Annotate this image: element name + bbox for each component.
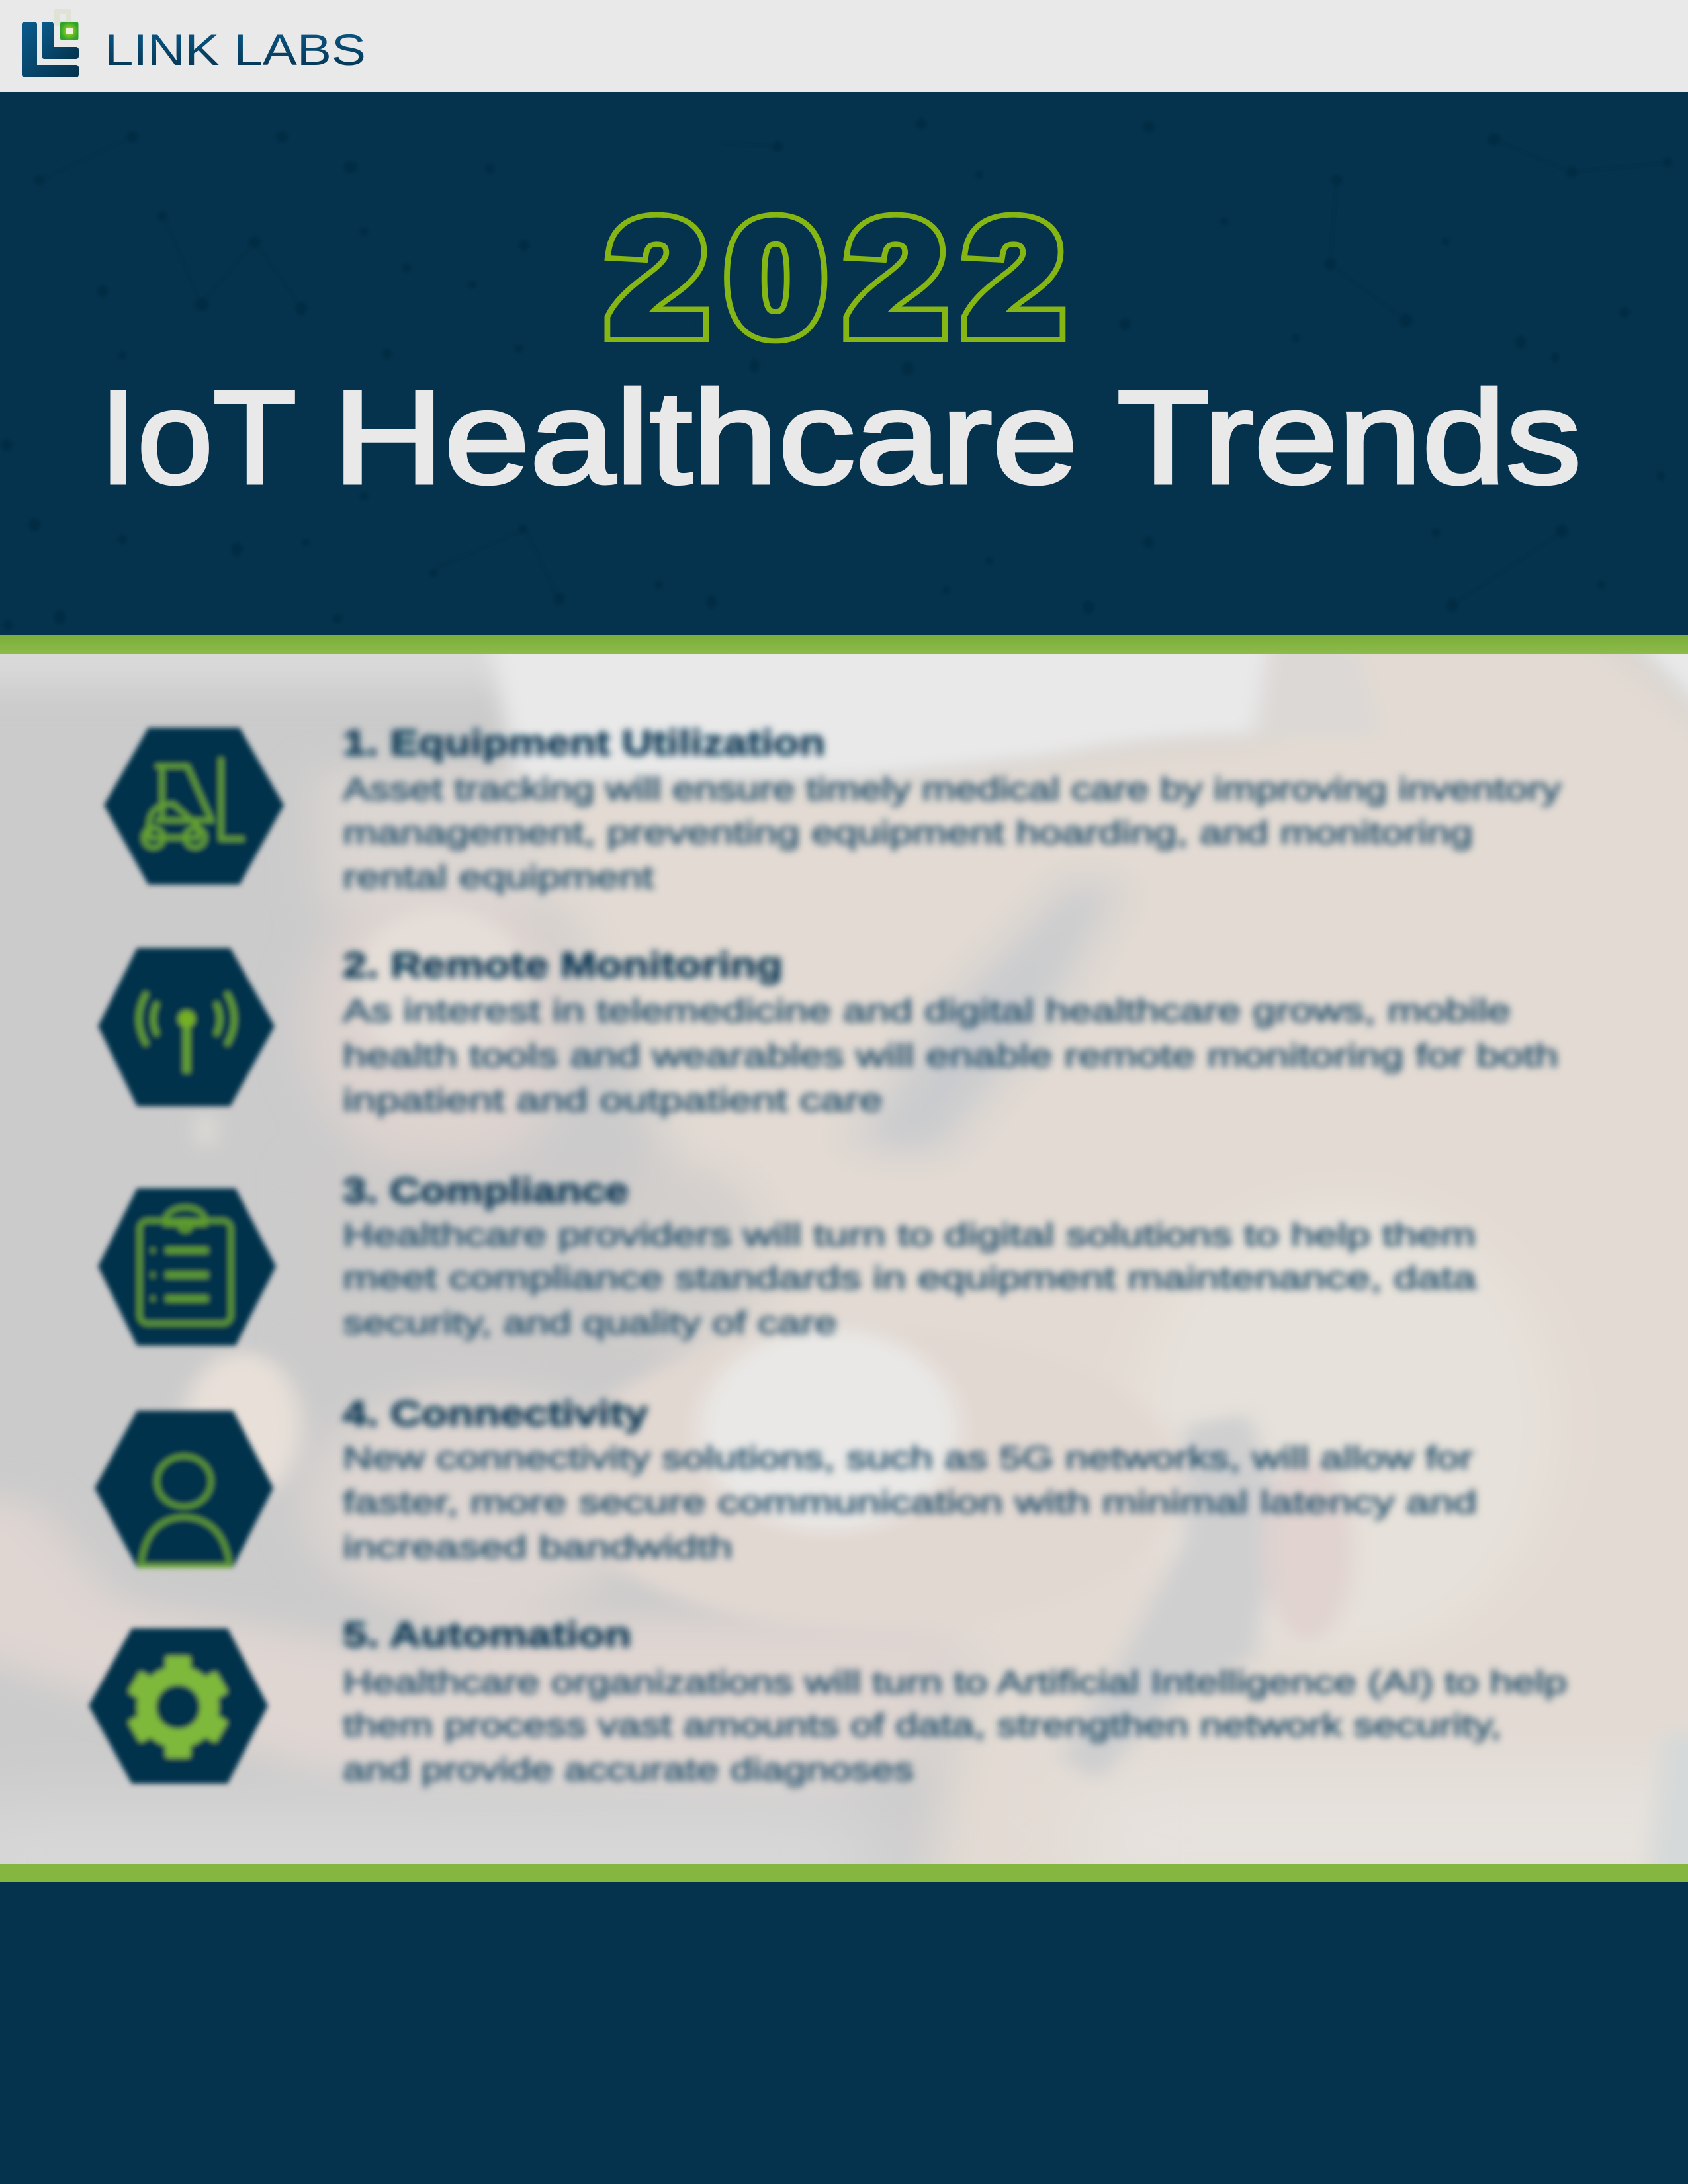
heading: IoT Healthcare Trends: Trends bbox=[1117, 364, 1581, 511]
description: meet compliance standards in equipment maintenance, data bbox=[343, 1261, 1476, 1296]
icon: clipboard in hexagon bbox=[98, 1188, 276, 1346]
title: 3. Compliance bbox=[343, 1171, 629, 1211]
item 2: Remote Monitoring bbox=[98, 945, 1558, 1118]
heading: IoT Healthcare Trends bbox=[99, 364, 1581, 511]
description bbox=[343, 1665, 1567, 1788]
green divider top bbox=[0, 635, 1688, 654]
description: New connectivity solutions, such as 5G networks, will allow for bbox=[343, 1441, 1473, 1476]
title: 2. Remote Monitoring bbox=[343, 945, 783, 985]
header bar bbox=[0, 0, 1688, 92]
description: security, and quality of care bbox=[343, 1306, 837, 1341]
item 4: Connectivity bbox=[95, 1394, 1477, 1567]
hero banner bbox=[0, 92, 1688, 635]
icon: person in hexagon bbox=[95, 1411, 273, 1567]
description bbox=[343, 772, 1561, 895]
description: Healthcare providers will turn to digital solutions to help them bbox=[343, 1218, 1476, 1253]
heading: IoT Healthcare Trends: Healthcare bbox=[333, 364, 1078, 511]
heading: 2022: 2022 bbox=[608, 188, 1063, 368]
item 1: Equipment Utilization bbox=[104, 723, 1561, 895]
icon: forklift in hexagon bbox=[104, 728, 284, 885]
background photo: blurred hands bbox=[0, 607, 1688, 1920]
icon: gear in hexagon bbox=[89, 1628, 268, 1784]
description: rental equipment bbox=[343, 860, 654, 895]
title: 4. Connectivity bbox=[343, 1394, 648, 1434]
heading: 2022: 2022 bbox=[608, 188, 1063, 368]
icon: antenna in hexagon bbox=[98, 948, 275, 1106]
heading: IoT Healthcare Trends: IoT bbox=[99, 364, 296, 511]
description: Healthcare organizations will turn to Artificial Intelligence (AI) to help bbox=[343, 1665, 1567, 1700]
description: Asset tracking will ensure timely medical care by improving inventory bbox=[343, 772, 1561, 807]
description: faster, more secure communication with minimal latency and bbox=[343, 1485, 1477, 1520]
logo: Link Labs: LINK LABS bbox=[105, 25, 366, 74]
footer band bbox=[0, 1882, 1688, 2184]
description bbox=[343, 1218, 1476, 1341]
description bbox=[343, 1441, 1477, 1565]
panel: trends list bbox=[0, 607, 1688, 1920]
title: 1. Equipment Utilization bbox=[343, 723, 825, 763]
description: and provide accurate diagnoses bbox=[343, 1753, 914, 1788]
green divider bottom bbox=[0, 1864, 1688, 1882]
item 3: Compliance bbox=[98, 1171, 1476, 1346]
description: health tools and wearables will enable remote monitoring for both bbox=[343, 1039, 1558, 1074]
title: 5. Automation bbox=[343, 1615, 631, 1655]
description: As interest in telemedicine and digital healthcare grows, mobile bbox=[343, 994, 1511, 1029]
logo: Link Labs bbox=[22, 9, 366, 77]
description: inpatient and outpatient care bbox=[343, 1083, 883, 1118]
item 5: Automation bbox=[89, 1615, 1567, 1788]
description: them process vast amounts of data, strengthen network security, bbox=[343, 1708, 1501, 1743]
description: management, preventing equipment hoarding, and monitoring bbox=[343, 816, 1473, 851]
description bbox=[343, 994, 1558, 1118]
description: increased bandwidth bbox=[343, 1530, 733, 1565]
